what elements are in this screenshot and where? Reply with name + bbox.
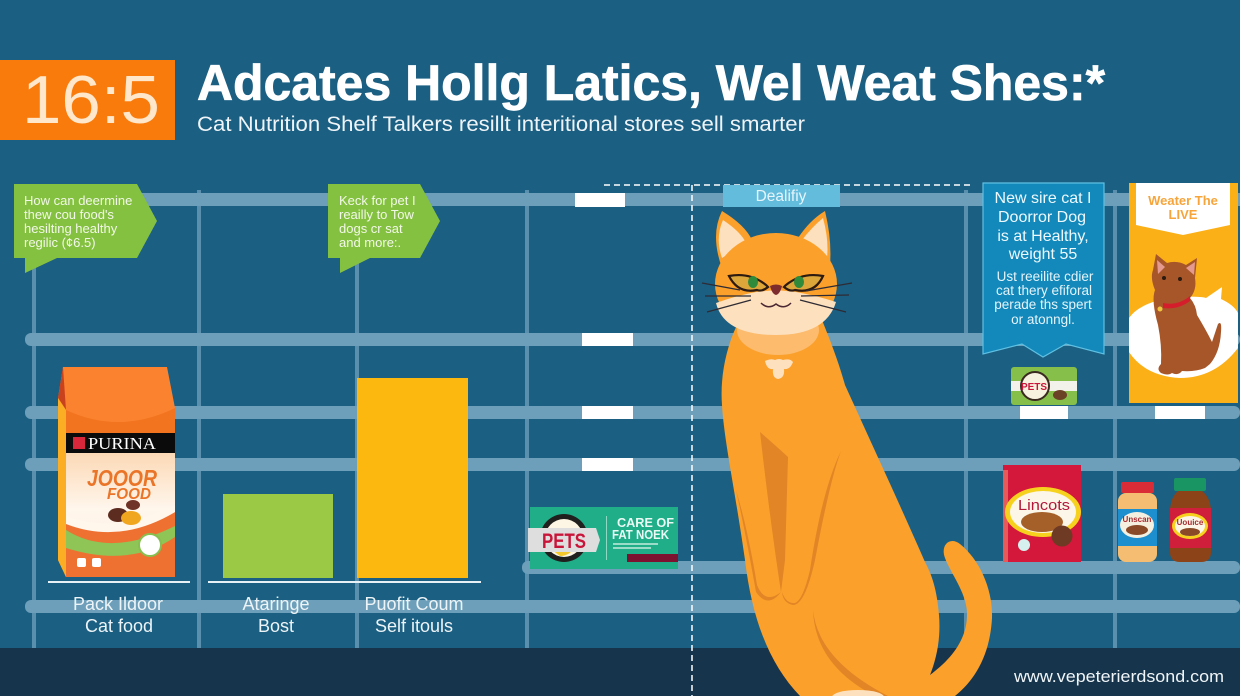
footer url: www.vepeterierdsond.com xyxy=(1013,668,1224,686)
callout: food health question: thew cou food's xyxy=(24,207,114,222)
label: puofic: Puofit Coum xyxy=(364,594,464,614)
product: blue jar xyxy=(1118,482,1157,562)
callout: pet reality: reailly to Tow xyxy=(339,207,415,222)
banner: healthy weight: Ust reeilite cdier xyxy=(997,269,1094,284)
callout: pet reality xyxy=(328,184,440,273)
title: Adcates Hollg Latics, Wel Weat Shes:* xyxy=(197,55,1106,111)
card: pets care: PETS xyxy=(542,530,586,553)
card: small pets pack: PETS xyxy=(1021,382,1047,393)
label: puofic: Self itouls xyxy=(375,616,453,636)
subtitle: Cat Nutrition Shelf Talkers resillt interitional stores sell smarter xyxy=(197,113,805,136)
product: Lincots box: Lincots xyxy=(1018,497,1070,514)
label: Dealifiy tag xyxy=(723,185,840,207)
banner: healthy weight: New sire cat I xyxy=(995,190,1091,207)
baseline xyxy=(48,581,190,583)
callout: pet reality: dogs cr sat xyxy=(339,221,403,236)
label: pack indoor: Pack Ildoor xyxy=(73,594,163,614)
banner: healthy weight: or atonngl. xyxy=(1011,312,1075,327)
callout: food health question: regilic (¢6.5) xyxy=(24,235,96,250)
product: Lincots box xyxy=(1003,465,1081,562)
product: Purina food bag: FOOD xyxy=(107,486,151,503)
label: pack indoor: Cat food xyxy=(85,616,153,636)
cat collar patch xyxy=(737,305,819,355)
badge: 16:5: 16:5 xyxy=(22,62,160,138)
card: small pets pack xyxy=(1011,367,1077,405)
banner: healthy weight: weight 55 xyxy=(1008,246,1077,263)
panel: live cat poster xyxy=(1129,183,1238,403)
callout: food health question xyxy=(14,184,157,273)
panel: live cat poster: Weater The xyxy=(1148,193,1218,208)
banner: healthy weight xyxy=(983,183,1104,357)
label: ataringe: Ataringe xyxy=(242,594,310,614)
cat nose and mouth xyxy=(770,284,782,295)
card: pets care xyxy=(528,507,678,569)
bar: green xyxy=(223,494,333,578)
callout: pet reality: Keck for pet I xyxy=(339,193,416,208)
label: ataringe: Bost xyxy=(258,616,294,636)
panel: live cat poster: LIVE xyxy=(1169,207,1198,222)
brown cat xyxy=(1152,254,1221,374)
product: red jar xyxy=(1170,478,1211,562)
baseline xyxy=(208,581,481,583)
product: Purina food bag xyxy=(58,367,175,577)
banner: healthy weight: perade ths spert xyxy=(994,297,1092,312)
illustration: orange cat with glasses xyxy=(702,211,992,696)
product: red jar: Uouice xyxy=(1177,518,1204,527)
banner: healthy weight: Doorror Dog xyxy=(998,209,1086,226)
card: pets care: CARE OF xyxy=(617,515,674,530)
callout: food health question: How can deermine xyxy=(24,193,132,208)
product: Purina food bag: PURINA xyxy=(88,434,157,453)
cat whiskers xyxy=(702,283,852,312)
label: Dealifiy tag: Dealifiy xyxy=(756,188,807,205)
callout: food health question: hesilting healthy xyxy=(24,221,118,236)
product: Purina food bag: JOOOR xyxy=(87,465,157,491)
bar: yellow xyxy=(357,378,468,578)
card: pets care: FAT NOEK xyxy=(612,527,670,542)
cat tail xyxy=(900,541,992,696)
callout: pet reality: and more:. xyxy=(339,235,401,250)
product: blue jar: Unscan xyxy=(1123,515,1152,524)
cat glasses xyxy=(729,275,768,291)
banner: healthy weight: cat thery efiforal xyxy=(996,283,1092,298)
cat head xyxy=(715,233,837,335)
cat body xyxy=(722,320,955,696)
banner: healthy weight: is at Healthy, xyxy=(997,228,1089,245)
cat ears xyxy=(716,211,752,268)
